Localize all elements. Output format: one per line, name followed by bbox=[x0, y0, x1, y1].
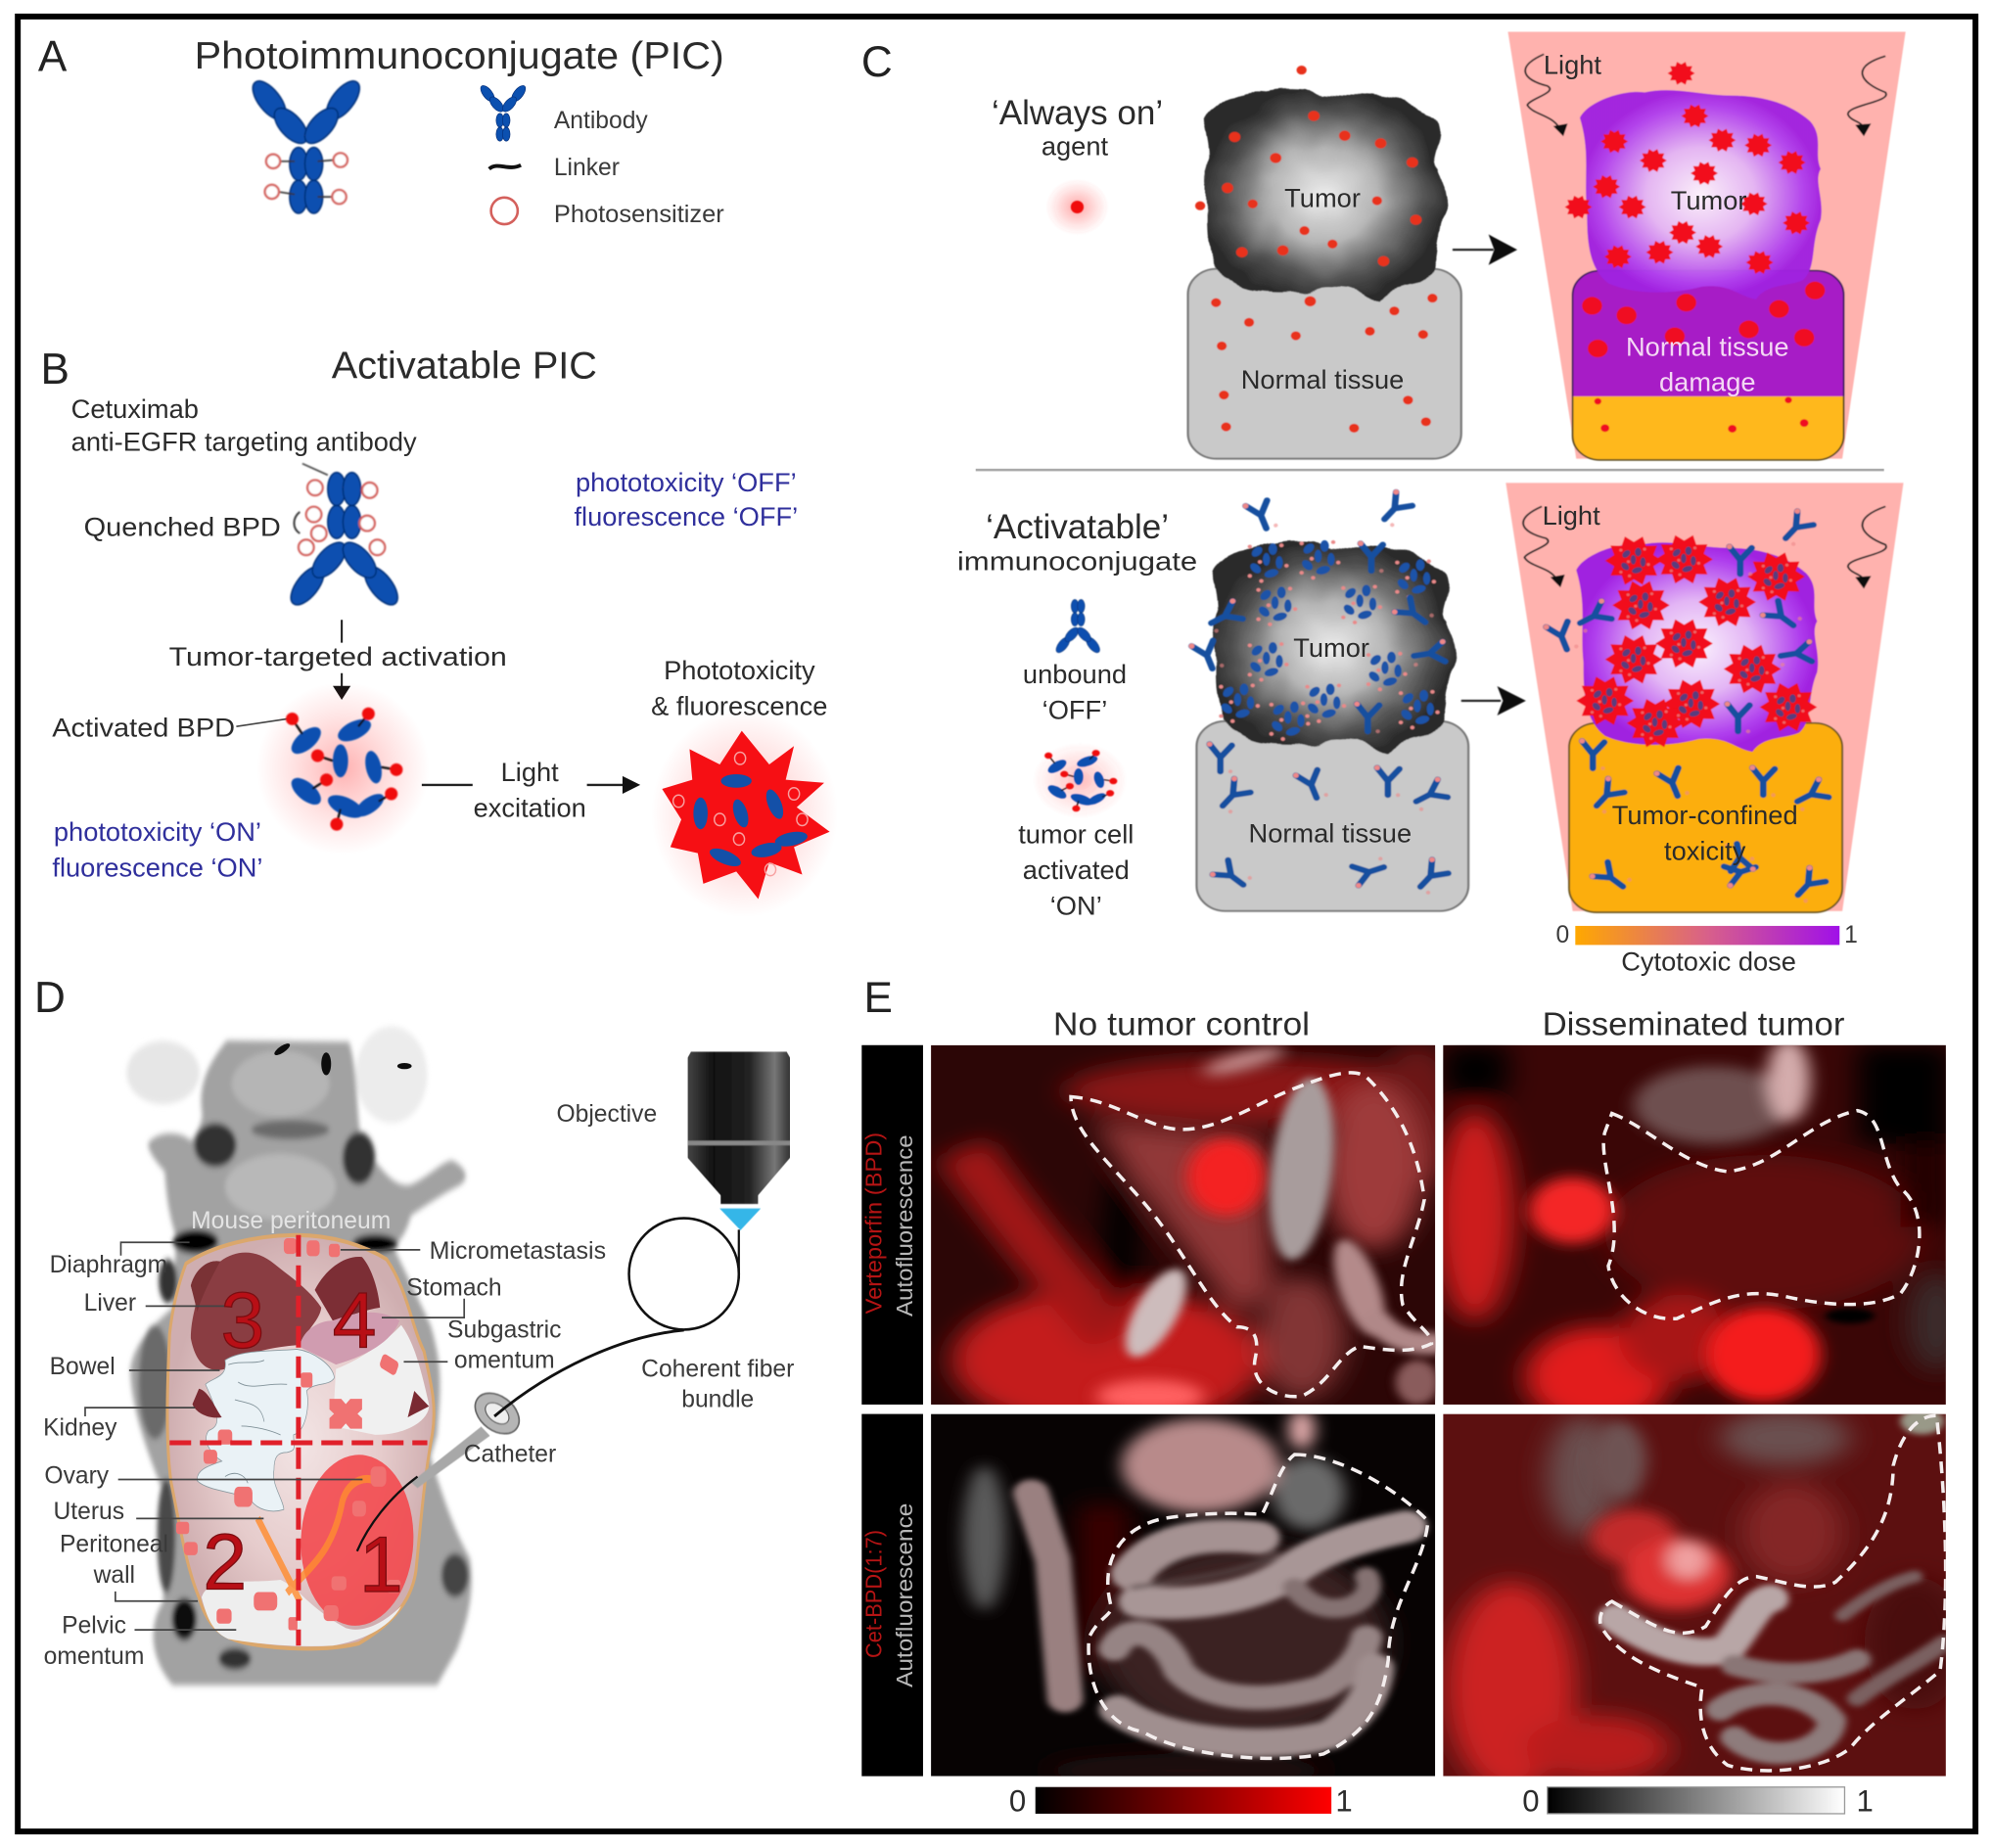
tissue damage bbox=[1573, 271, 1844, 460]
separator bbox=[976, 469, 1884, 471]
orange tissue bbox=[1569, 723, 1842, 912]
label: phototoxicity and fluorescence: Phototoxicity bbox=[664, 655, 815, 685]
peritoneum outline bbox=[167, 1235, 434, 1648]
arrow bbox=[1461, 686, 1526, 716]
fiber coil bbox=[357, 1219, 739, 1551]
anatomy labels: Stomach bbox=[406, 1275, 502, 1302]
quadrant numbers: 4 bbox=[333, 1277, 376, 1365]
panel letter A: A bbox=[38, 33, 68, 81]
tumor agent dots bbox=[1195, 66, 1437, 433]
cytotoxic dose colorbar: 1 bbox=[1844, 922, 1858, 948]
top row text: Normal tissue bbox=[1626, 331, 1789, 361]
top row art: always on agent bbox=[1045, 32, 1906, 460]
liver bbox=[191, 1253, 321, 1370]
legend icon: unbound bbox=[1053, 599, 1102, 655]
anatomy labels: bundle bbox=[681, 1387, 754, 1413]
legend: antibody label: Antibody bbox=[554, 108, 648, 134]
state text: off bbox=[574, 467, 798, 531]
column title: no tumor control: No tumor control bbox=[1053, 1006, 1310, 1043]
micrograph: no tumor control, Cet-BPD bbox=[931, 1409, 1435, 1787]
state text: on: phototoxicity ‘ON’ bbox=[54, 816, 261, 847]
unbound antibodies bbox=[1543, 508, 1832, 903]
bottom row text: immunoconjugate bbox=[957, 546, 1197, 577]
stomach lower bbox=[301, 1313, 399, 1364]
right omentum bbox=[333, 1325, 429, 1435]
micrograph: disseminated tumor, verteporfin bbox=[1443, 1045, 1946, 1405]
anatomy labels: Objective bbox=[556, 1101, 657, 1128]
cytotoxic dose colorbar: Cytotoxic dose bbox=[1621, 946, 1796, 976]
label: tumor-targeted activation: Tumor-targeted activation bbox=[169, 641, 507, 671]
panel C: always on versus activatable bbox=[861, 32, 1906, 976]
agent dot icon bbox=[1045, 179, 1109, 235]
heading: Photoimmunoconjugate (PIC) bbox=[195, 35, 724, 77]
bottom row text: Light bbox=[1543, 500, 1600, 531]
label: targeting antibody: anti-EGFR targeting antibody bbox=[71, 427, 417, 457]
objective lens bbox=[688, 1052, 790, 1230]
arrow: light excitation bbox=[422, 776, 640, 794]
panel letter D: D bbox=[34, 974, 66, 1022]
anatomy labels: wall bbox=[93, 1562, 135, 1589]
legend bbox=[478, 83, 724, 228]
quadrant numbers: 1 bbox=[359, 1521, 403, 1609]
micrograph: disseminated tumor, Cet-BPD bbox=[1443, 1408, 1966, 1793]
legend: linker label: Linker bbox=[554, 155, 620, 181]
top row text: Tumor bbox=[1671, 185, 1746, 215]
kidneys bbox=[193, 1389, 429, 1417]
panel letter C: C bbox=[861, 38, 893, 86]
heading: Activatable PIC bbox=[332, 346, 597, 388]
icon: antibody with photosensitizers bbox=[247, 75, 365, 213]
bottom row text: toxicity bbox=[1664, 835, 1746, 865]
grayscale colorbar: 0 bbox=[1522, 1783, 1540, 1818]
row strips bbox=[861, 1045, 923, 1777]
legend: linker icon bbox=[489, 165, 521, 169]
state text: off: fluorescence ‘OFF’ bbox=[574, 501, 798, 531]
bottom row text: tumor cell bbox=[1018, 819, 1134, 850]
anatomy labels: Liver bbox=[84, 1290, 136, 1317]
state text: on bbox=[52, 816, 262, 882]
legend: photosensitizer label: Photosensitizer bbox=[554, 202, 724, 228]
leader lines bbox=[85, 1242, 464, 1630]
uterus bbox=[257, 1479, 379, 1601]
bottom row text: ‘OFF’ bbox=[1042, 694, 1107, 724]
label: cetuximab: Cetuximab bbox=[71, 393, 199, 424]
tumor bbox=[1202, 90, 1444, 300]
light cone bbox=[1506, 483, 1904, 911]
pelvic omentum bbox=[202, 1580, 401, 1646]
bottom row text: Tumor-confined bbox=[1612, 800, 1798, 830]
top row text: agent bbox=[1042, 130, 1108, 161]
top row text: Normal tissue bbox=[1241, 364, 1404, 394]
legend: antibody icon bbox=[478, 83, 528, 141]
bottom row text: Tumor bbox=[1293, 632, 1369, 663]
column title: disseminated tumor: Disseminated tumor bbox=[1543, 1006, 1844, 1043]
purple tumor bbox=[1576, 542, 1818, 752]
row labels: Cet-BPD(1:7) bbox=[861, 1530, 887, 1658]
label: activated BPD: Activated BPD bbox=[52, 713, 235, 743]
bottom row text: activated bbox=[1023, 855, 1130, 885]
grayscale colorbar: 1 bbox=[1857, 1783, 1874, 1818]
top row text: Tumor bbox=[1284, 183, 1361, 213]
bottom row text: ‘Activatable’ bbox=[986, 508, 1169, 546]
label: light excitation bbox=[474, 757, 586, 822]
anatomy labels: omentum bbox=[44, 1643, 144, 1670]
label: phototoxicity and fluorescence: & fluorescence bbox=[651, 691, 827, 721]
anatomy labels: omentum bbox=[454, 1348, 555, 1374]
bowel bbox=[197, 1349, 335, 1511]
organs bbox=[191, 1253, 429, 1646]
top row text bbox=[992, 49, 1789, 397]
row labels: Autofluorescence bbox=[892, 1503, 917, 1687]
arrow: tumor-targeted activation bbox=[333, 620, 350, 700]
label: light excitation: Light bbox=[501, 757, 559, 787]
cytotoxic dose colorbar bbox=[1555, 922, 1858, 976]
bottom row text: ‘ON’ bbox=[1050, 890, 1102, 920]
quadrant numbers: 2 bbox=[203, 1518, 247, 1606]
top row text: ‘Always on’ bbox=[992, 94, 1163, 132]
bottom row text: unbound bbox=[1023, 659, 1127, 689]
anatomy labels: Kidney bbox=[43, 1414, 117, 1441]
icon: red burst bbox=[651, 710, 838, 917]
tumor bbox=[1211, 542, 1453, 752]
legend icon: activated bbox=[1033, 742, 1128, 818]
bottom row text bbox=[957, 500, 1798, 920]
light squiggles bbox=[1523, 506, 1886, 588]
arrow bbox=[1453, 235, 1517, 265]
anatomy labels: Bowel bbox=[50, 1354, 116, 1380]
anatomy labels: Catheter bbox=[464, 1442, 556, 1468]
normal tissue bbox=[1196, 721, 1468, 911]
anatomy labels: Diaphragm bbox=[50, 1252, 167, 1278]
cytotoxic dose colorbar: 0 bbox=[1555, 922, 1569, 948]
light squiggles bbox=[1525, 54, 1886, 136]
panel letter B: B bbox=[41, 346, 69, 393]
label: phototoxicity and fluorescence bbox=[651, 655, 827, 721]
anatomy labels: Coherent fiber bbox=[641, 1357, 794, 1383]
bottom row text: Normal tissue bbox=[1249, 817, 1412, 848]
row labels bbox=[861, 1132, 917, 1687]
bottom row art: activatable bbox=[1033, 483, 1904, 912]
micrometastases bbox=[176, 1238, 400, 1631]
panel D: mouse peritoneum imaging bbox=[34, 974, 794, 1686]
toxic agent bursts bbox=[1565, 62, 1810, 274]
quadrant dashed lines bbox=[169, 1235, 428, 1645]
liver left lobe bbox=[191, 1261, 220, 1312]
anatomy labels: Ovary bbox=[44, 1463, 110, 1490]
dark specks bbox=[273, 1041, 412, 1076]
anatomy labels: Mouse peritoneum bbox=[191, 1208, 391, 1234]
panel E: fluorescence images bbox=[861, 974, 1966, 1818]
top row text: damage bbox=[1659, 367, 1756, 397]
panel B: activatable PIC bbox=[41, 346, 838, 917]
icon: activated cluster bbox=[236, 682, 430, 855]
icon: quenched antibody bbox=[285, 464, 403, 610]
catheter bbox=[411, 1385, 527, 1488]
red colorbar bbox=[1009, 1783, 1353, 1818]
panel A: photoimmunoconjugate bbox=[38, 33, 724, 228]
tumor zone one bbox=[293, 1445, 422, 1636]
row labels: Autofluorescence bbox=[892, 1134, 917, 1317]
quadrant numbers bbox=[203, 1277, 403, 1609]
image grid bbox=[861, 1039, 1966, 1793]
light cone bbox=[1507, 32, 1906, 459]
grayscale colorbar bbox=[1522, 1783, 1874, 1818]
red colorbar: 0 bbox=[1009, 1783, 1026, 1818]
quadrant numbers: 3 bbox=[221, 1277, 264, 1365]
row labels: Verteporfin (BPD) bbox=[861, 1132, 887, 1314]
panel letter E: E bbox=[864, 974, 893, 1022]
label: light excitation: excitation bbox=[474, 792, 586, 822]
label: quenched BPD: Quenched BPD bbox=[84, 512, 281, 542]
stomach bbox=[315, 1257, 380, 1320]
micrograph: no tumor control, verteporfin bbox=[931, 1042, 1460, 1432]
anatomy labels bbox=[43, 1101, 794, 1670]
state text: on: fluorescence ‘ON’ bbox=[52, 852, 262, 882]
unbound and bound agents bbox=[1188, 488, 1452, 896]
anatomy labels: Uterus bbox=[54, 1499, 124, 1525]
anatomy labels: Subgastric bbox=[447, 1317, 561, 1343]
mouse silhouette bbox=[126, 1027, 472, 1686]
mouse anatomy bbox=[126, 1027, 472, 1686]
purple tumor bbox=[1580, 90, 1822, 300]
top row text: Light bbox=[1544, 49, 1601, 79]
anatomy labels: Peritoneal bbox=[60, 1532, 168, 1558]
state text: off: phototoxicity ‘OFF’ bbox=[576, 467, 797, 497]
normal tissue bbox=[1188, 269, 1461, 459]
legend: photosensitizer icon bbox=[491, 198, 518, 224]
activated bursts bbox=[1576, 535, 1817, 747]
anatomy labels: Pelvic bbox=[62, 1613, 126, 1640]
dots in tissue bbox=[1582, 282, 1825, 433]
anatomy labels: Micrometastasis bbox=[430, 1238, 606, 1265]
leader lines, fiber and objective bbox=[85, 1052, 790, 1630]
red colorbar: 1 bbox=[1335, 1783, 1353, 1818]
